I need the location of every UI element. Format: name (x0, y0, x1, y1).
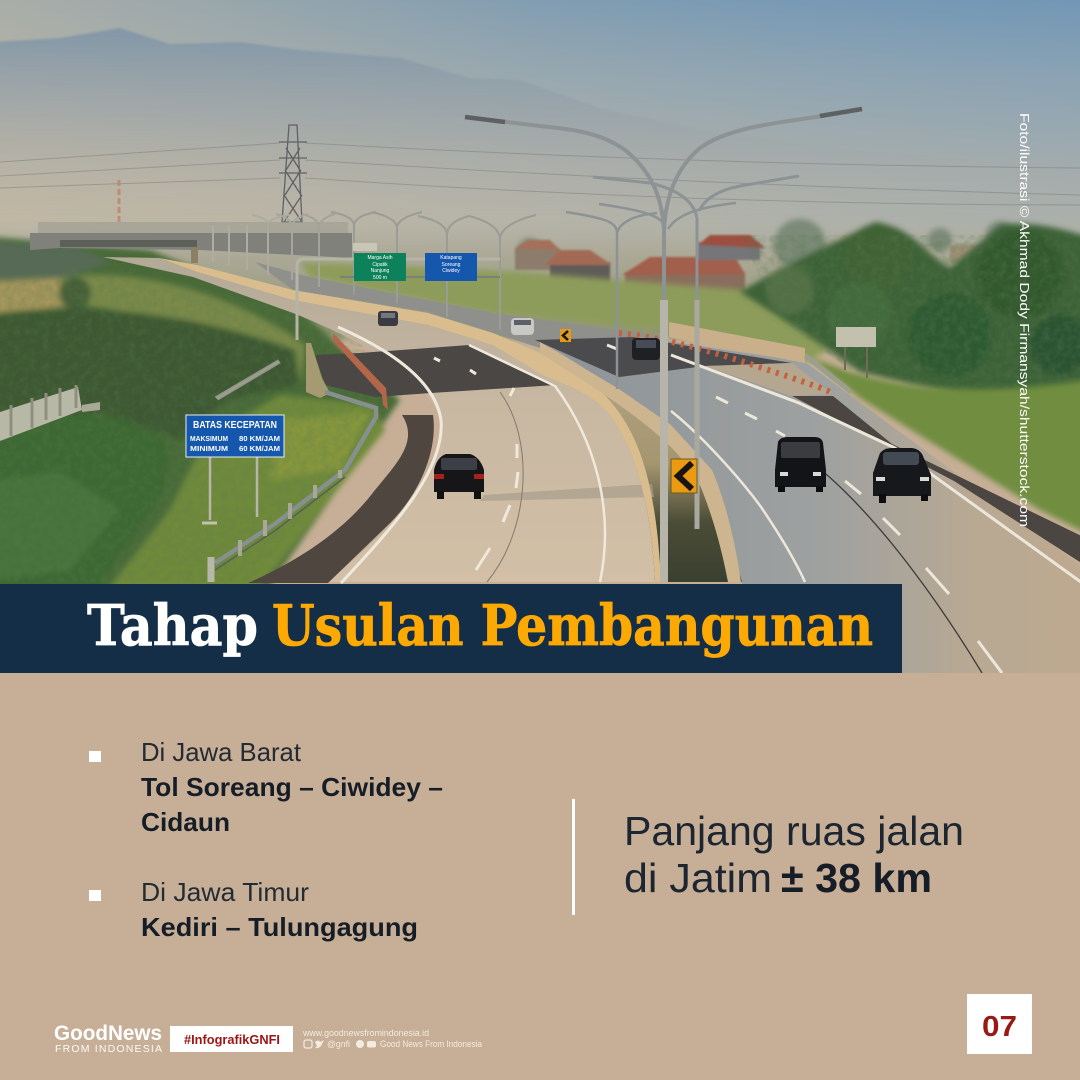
red communication tower (118, 180, 120, 225)
overpass bridge (30, 222, 352, 263)
sign: Katapang: Katapang (440, 255, 462, 261)
icon: youtube (367, 1041, 376, 1048)
main lamp poles (465, 109, 862, 582)
car far 2 (511, 318, 534, 335)
sign: Katapang (425, 253, 477, 281)
gap between carriageways (605, 395, 742, 582)
sign: Marga Asih: Cipatik (372, 262, 388, 268)
far carriageway (540, 337, 1080, 680)
logo: GoodNews From Indonesia (54, 1022, 162, 1055)
signboard back, right (836, 327, 876, 378)
website and socials: @gnfi (327, 1039, 350, 1049)
sign: Marga Asih: Nanjung (371, 268, 390, 274)
small rail on slope (215, 360, 280, 400)
median barrier far road (540, 342, 741, 582)
list item: Jawa Timur: Kediri – Tulungagung (141, 912, 418, 942)
speed limit sign (186, 415, 284, 523)
title band: Tahap (87, 593, 258, 659)
black van front (775, 437, 826, 492)
black MPV front (873, 448, 931, 503)
sign: Marga Asih: Marga Asih (367, 255, 393, 261)
dark asphalt on far road (535, 337, 792, 377)
sign gantry (297, 243, 500, 340)
road length text (624, 808, 964, 901)
sign: Katapang: Soreang (442, 262, 461, 268)
icon: instagram (304, 1040, 312, 1048)
near carriageway (103, 257, 655, 582)
list item: Jawa Barat: Tol Soreang – Ciwidey – (141, 772, 443, 802)
road length text: Panjang ruas jalan (624, 808, 964, 854)
black SUV rear view (434, 454, 484, 499)
list item: Jawa Timur (89, 877, 418, 942)
upper far road (255, 262, 668, 348)
page number (967, 994, 1032, 1054)
title band: Usulan Pembangunan (272, 593, 873, 659)
distant trees (518, 219, 1014, 271)
dark asphalt crossing (315, 345, 556, 397)
photo: toll road at sunrise (0, 0, 1080, 680)
page number: 07 (982, 1011, 1017, 1043)
logo: GoodNews From Indonesia: GoodNews (54, 1022, 162, 1045)
guardrail by signboard (804, 353, 850, 394)
road length text: ± 38 km (781, 855, 932, 901)
speed limit sign: 60 KM/JAM (239, 444, 280, 453)
power lines (0, 143, 1080, 205)
list item: Jawa Barat: Cidaun (141, 807, 230, 837)
distant light poles (213, 212, 536, 330)
list item: Jawa Barat (89, 737, 443, 837)
sky (0, 0, 1080, 238)
shadow band on near road (480, 484, 654, 501)
car far 3 (632, 338, 660, 360)
title band (0, 584, 902, 673)
sign: Marga Asih (354, 253, 406, 281)
sign: Katapang: Ciwidey (442, 268, 460, 274)
gravel shoulder near road (248, 415, 434, 583)
far concrete barrier (669, 322, 805, 363)
photo credit: Foto/ilustrasi © Akhmad Dody Firmansyah/shutterstock.com (1017, 113, 1032, 527)
concrete apron (705, 363, 832, 396)
orange traffic cones (619, 333, 830, 392)
website and socials: Good News From Indonesia (380, 1039, 482, 1049)
distant land haze (0, 218, 1080, 338)
road length text: di Jatim (624, 855, 772, 901)
list item: Jawa Timur: Di Jawa Timur (141, 877, 309, 907)
left land (0, 236, 400, 600)
speed limit sign: MINIMUM (190, 444, 228, 453)
speed limit sign: 80 KM/JAM (239, 434, 280, 443)
speed limit sign: BATAS KECEPATAN (193, 420, 277, 431)
website and socials (302, 1028, 482, 1049)
mountains (0, 28, 543, 164)
orange stripe barrier (333, 333, 388, 410)
forest right (740, 222, 1080, 400)
far road markings (607, 345, 1080, 673)
website and socials: www.goodnewsfromindonesia.id (302, 1028, 429, 1038)
list item: Jawa Barat: Di Jawa Barat (141, 737, 302, 767)
chevron sign (671, 459, 697, 493)
right gravel shoulder (792, 396, 1080, 575)
right grass bank (808, 356, 1080, 540)
concrete wall left (0, 385, 100, 441)
car far 1 (378, 311, 398, 326)
transmission tower (279, 125, 307, 222)
speed limit sign: MAKSIMUM (190, 434, 228, 443)
logo: GoodNews From Indonesia: FROM INDONESIA (55, 1043, 162, 1055)
hashtag box: #InfografikGNFI (184, 1032, 280, 1047)
grass behind far road (300, 262, 830, 362)
hashtag box (170, 1026, 293, 1052)
guardrail (211, 392, 376, 582)
sign: Marga Asih: 500 m (373, 275, 387, 281)
divider (572, 799, 575, 915)
median barrier near road (159, 258, 661, 582)
icon: facebook (356, 1040, 364, 1048)
small chevron sign (560, 329, 571, 342)
concrete rail end (306, 343, 330, 398)
icon: twitter (315, 1040, 324, 1048)
bottom tan panel (0, 673, 1080, 1080)
near road markings (338, 327, 605, 583)
distant houses (515, 235, 1005, 294)
